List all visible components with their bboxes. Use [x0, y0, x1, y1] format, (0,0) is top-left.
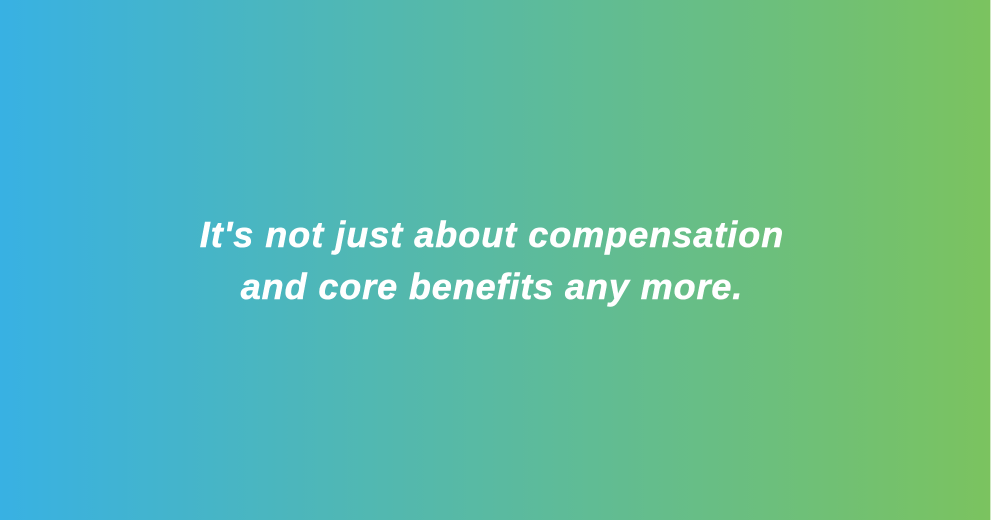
headline text: and core benefits any more. — [241, 266, 743, 307]
headline text — [200, 214, 784, 307]
headline text: It's not just about compensation — [200, 214, 784, 255]
